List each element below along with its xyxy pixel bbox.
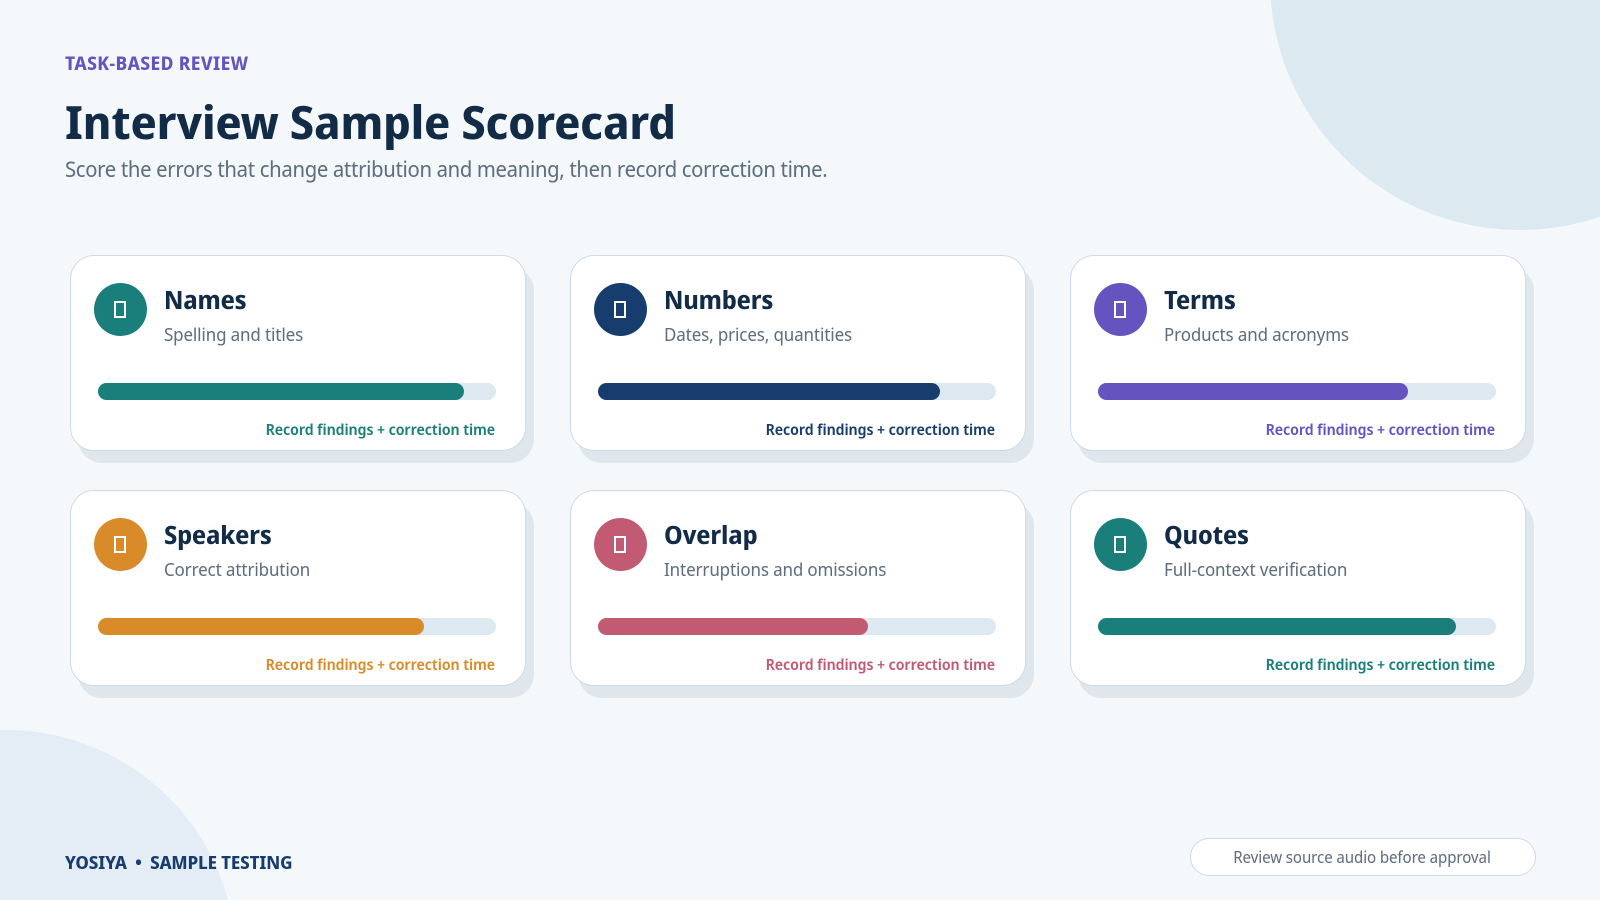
panel: speakers [70,490,534,698]
panel: names [70,255,534,463]
text: terms: Products and acronyms [1164,323,1349,347]
heading: quotes: Quotes [1164,518,1249,552]
heading: terms: Terms [1164,283,1236,317]
icon: quotes [1094,518,1147,571]
icon: numbers [594,283,647,336]
icon: terms [1094,283,1147,336]
icon: speakers [94,518,147,571]
progress bar: speakers [98,618,496,635]
note: terms: Record findings + correction time [1266,420,1495,440]
note: speakers: Record findings + correction time [266,655,495,675]
text: names: Spelling and titles [164,323,303,347]
progress bar: overlap [598,618,996,635]
callout pill [1190,838,1536,876]
heading: overlap: Overlap [664,518,757,552]
progress bar: names [98,383,496,400]
progress bar: quotes [1098,618,1496,635]
panel: quotes [1070,490,1534,698]
panel: numbers [570,255,1034,463]
text: numbers: Dates, prices, quantities [664,323,852,347]
panel: overlap [570,490,1034,698]
icon: names [94,283,147,336]
text: overlap: Interruptions and omissions [664,558,886,582]
eyebrow: TASK-BASED REVIEW [65,51,249,76]
title: Interview Sample Scorecard [65,91,676,153]
text: quotes: Full-context verification [1164,558,1347,582]
progress bar: numbers [598,383,996,400]
text: speakers: Correct attribution [164,558,310,582]
callout pill: Review source audio before approval [1233,846,1491,868]
footer label: YOSIYA • SAMPLE TESTING [65,851,292,875]
heading: names: Names [164,283,246,317]
note: overlap: Record findings + correction time [766,655,995,675]
note: quotes: Record findings + correction time [1266,655,1495,675]
progress bar: terms [1098,383,1496,400]
icon: overlap [594,518,647,571]
note: names: Record findings + correction time [266,420,495,440]
panel: terms [1070,255,1534,463]
heading: speakers: Speakers [164,518,272,552]
subtitle: Score the errors that change attribution and meaning, then record correction time. [65,155,827,184]
note: numbers: Record findings + correction time [766,420,995,440]
heading: numbers: Numbers [664,283,773,317]
